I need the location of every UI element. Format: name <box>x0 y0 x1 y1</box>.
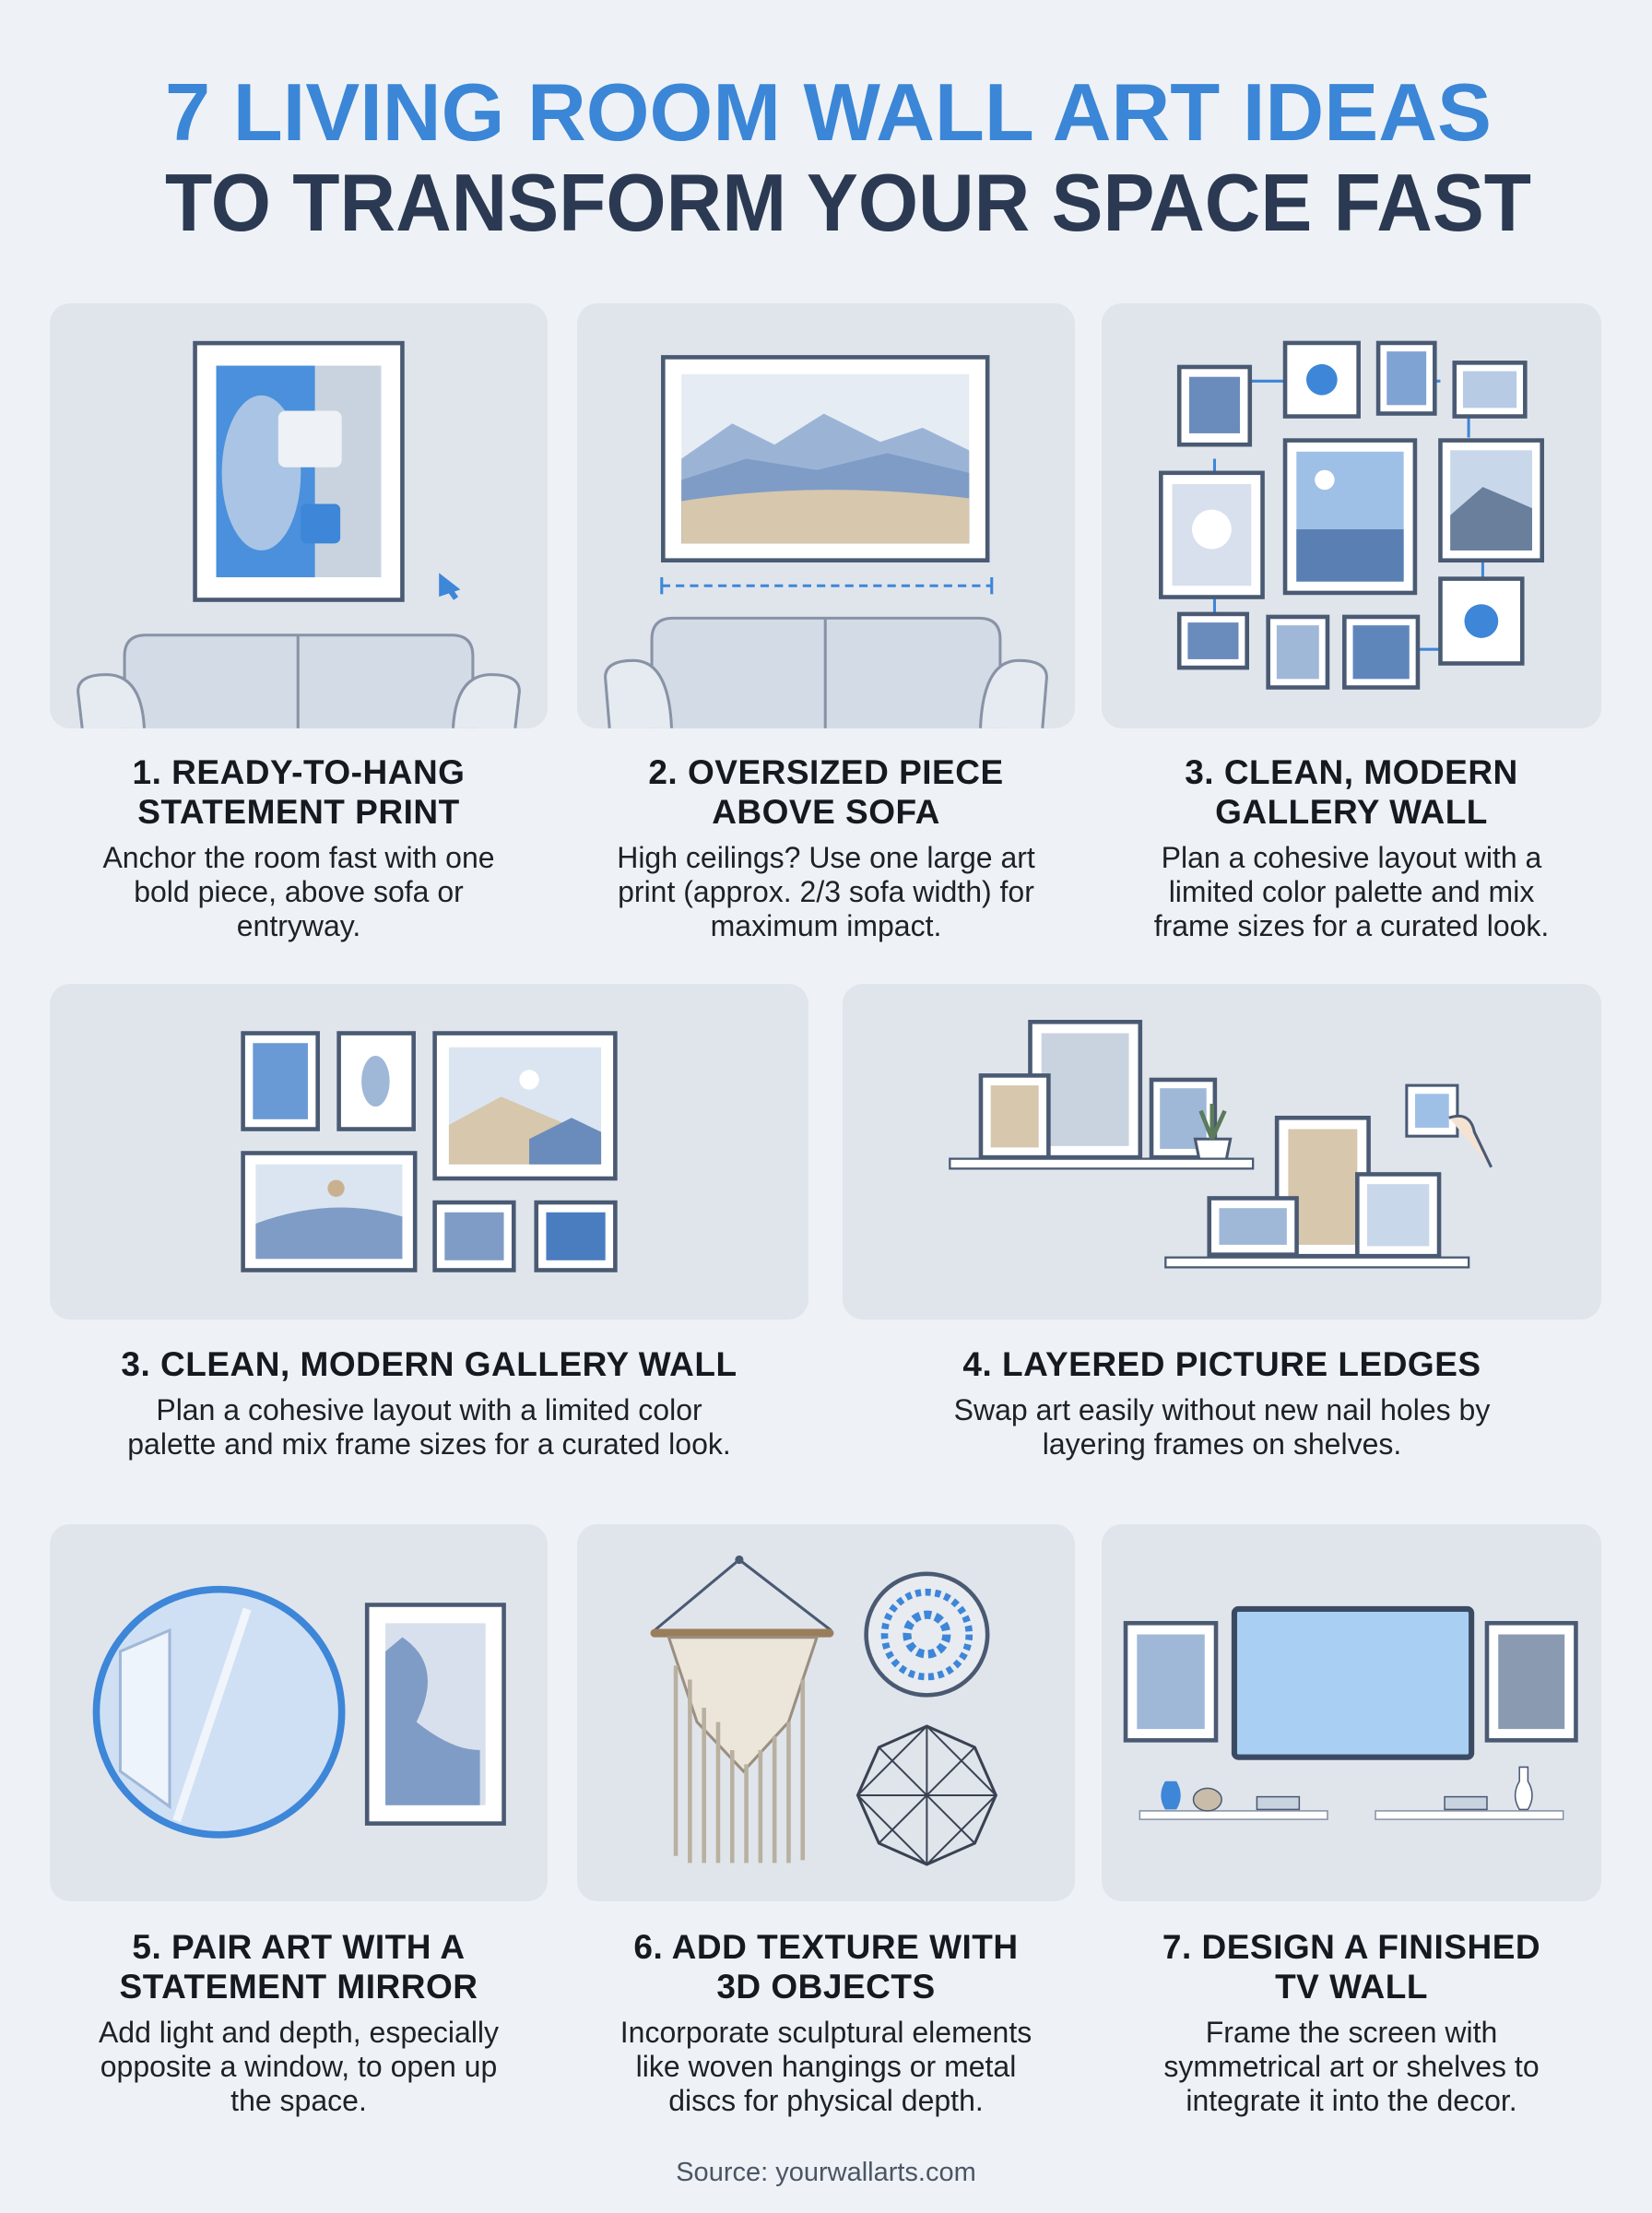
panel: 7 TV wall <box>1102 1524 1601 1901</box>
caption 5 <box>99 1928 499 2117</box>
caption 7: symmetrical art or shelves to <box>1163 2050 1540 2083</box>
caption 3: 3. CLEAN, MODERN <box>1185 753 1518 791</box>
caption 5: Add light and depth, especially <box>99 2016 499 2049</box>
caption 3: Plan a cohesive layout with a <box>1162 841 1541 874</box>
caption 1: entryway. <box>237 909 360 942</box>
caption 2: print (approx. 2/3 sofa width) for <box>618 875 1034 908</box>
caption 2: maximum impact. <box>711 909 941 942</box>
panel: 3b gallery wall wide <box>50 984 808 1320</box>
caption 5: 5. PAIR ART WITH A <box>132 1928 466 1966</box>
caption 7: integrate it into the decor. <box>1186 2084 1517 2117</box>
caption 3b: palette and mix frame sizes for a curated look. <box>127 1427 731 1461</box>
caption 3 <box>1154 753 1549 942</box>
panel: 2 oversized piece <box>577 303 1075 728</box>
caption 3b: 3. CLEAN, MODERN GALLERY WALL <box>121 1345 738 1383</box>
caption 3b: Plan a cohesive layout with a limited color <box>156 1393 702 1426</box>
caption 2: ABOVE SOFA <box>712 793 940 831</box>
caption 6: 6. ADD TEXTURE WITH <box>633 1928 1019 1966</box>
caption 2 <box>617 753 1035 942</box>
caption 6 <box>620 1928 1032 2117</box>
caption 4: layering frames on shelves. <box>1043 1427 1401 1461</box>
caption 2: 2. OVERSIZED PIECE <box>648 753 1004 791</box>
caption 5: the space. <box>230 2084 367 2117</box>
caption 4: 4. LAYERED PICTURE LEDGES <box>962 1345 1481 1383</box>
title <box>165 66 1531 243</box>
caption 3: limited color palette and mix <box>1169 875 1534 908</box>
panel: 6 3D objects <box>577 1524 1075 1901</box>
panel: 5 statement mirror <box>50 1524 548 1901</box>
caption 3b <box>121 1345 738 1461</box>
caption 7 <box>1162 1928 1540 2117</box>
source: Source: yourwallarts.com <box>676 2158 976 2187</box>
caption 6: like woven hangings or metal <box>636 2050 1016 2083</box>
panel: 3 gallery wall <box>1102 303 1601 728</box>
caption 3: GALLERY WALL <box>1215 793 1488 831</box>
caption 3: frame sizes for a curated look. <box>1154 909 1549 942</box>
title: 7 LIVING ROOM WALL ART IDEAS <box>165 66 1492 158</box>
caption 4 <box>954 1345 1490 1461</box>
panel: 4 picture ledges <box>843 984 1601 1320</box>
panel: 1 statement print <box>50 303 548 728</box>
caption 4: Swap art easily without new nail holes by <box>954 1393 1490 1426</box>
caption 1: bold piece, above sofa or <box>134 875 464 908</box>
caption 1 <box>102 753 495 942</box>
caption 6: discs for physical depth. <box>668 2084 984 2117</box>
caption 6: 3D OBJECTS <box>716 1968 936 2006</box>
caption 6: Incorporate sculptural elements <box>620 2016 1032 2049</box>
caption 7: 7. DESIGN A FINISHED <box>1162 1928 1540 1966</box>
caption 7: TV WALL <box>1275 1968 1428 2006</box>
caption 1: STATEMENT PRINT <box>137 793 460 831</box>
caption 5: STATEMENT MIRROR <box>120 1968 478 2006</box>
caption 2: High ceilings? Use one large art <box>617 841 1035 874</box>
caption 7: Frame the screen with <box>1206 2016 1497 2049</box>
caption 1: Anchor the room fast with one <box>102 841 495 874</box>
caption 5: opposite a window, to open up <box>100 2050 497 2083</box>
caption 1: 1. READY-TO-HANG <box>133 753 465 791</box>
